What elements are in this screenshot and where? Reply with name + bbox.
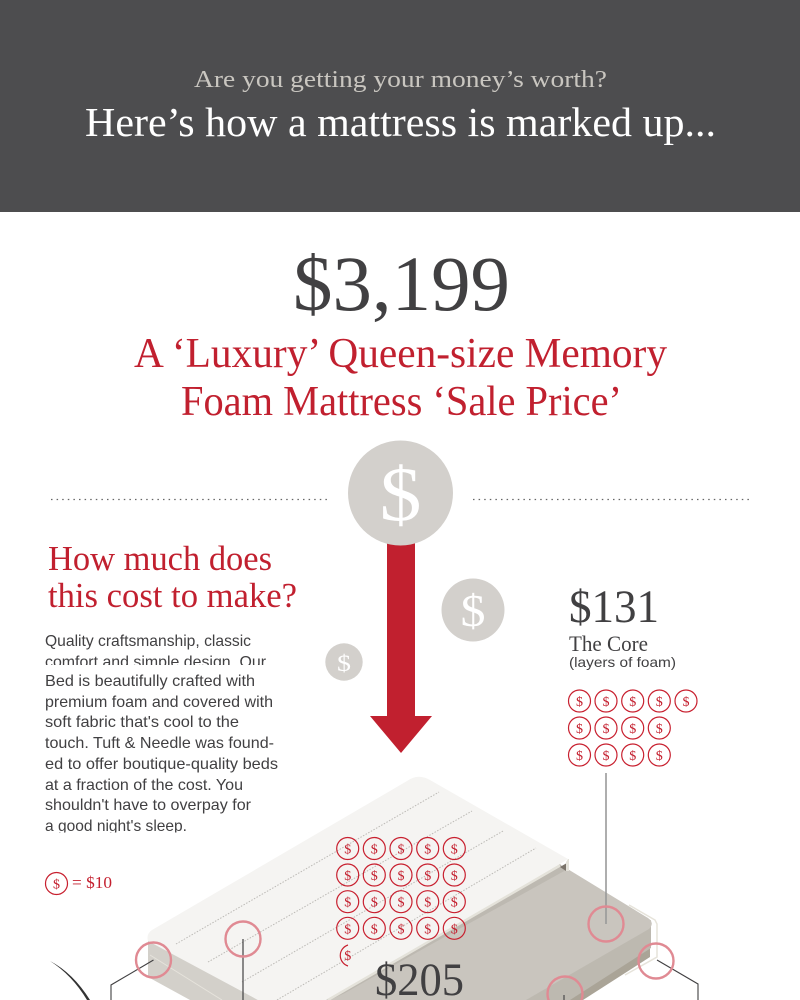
comfort layer coins: twenty and a half dollar coins: $ [424, 842, 431, 858]
body text block [45, 633, 278, 835]
legend: one coin equals ten dollars: $ [53, 878, 60, 892]
mattress illustration [148, 777, 657, 1000]
core price figure: $131 [569, 581, 659, 633]
core coins: thirteen dollar coins: $ [656, 695, 663, 710]
comfort layer coins: twenty and a half dollar coins: $ [371, 842, 378, 858]
mattress cover side [148, 937, 258, 1000]
comfort layer coins: twenty and a half dollar coins: $ [344, 842, 351, 858]
comfort layer coins: twenty and a half dollar coins: $ [344, 949, 351, 964]
mattress stitching [176, 792, 536, 1000]
icon: medium dollar coin [442, 578, 504, 642]
comfort layer coins: twenty and a half dollar coins: $ [371, 896, 378, 911]
core coins: thirteen dollar coins: $ [602, 722, 610, 737]
core coins: thirteen dollar coins: $ [602, 749, 610, 764]
body text block: Quality craftsmanship, classic [45, 633, 251, 650]
mattress core right side [555, 938, 650, 1000]
body text block: comfort and simple design. Our [45, 654, 267, 671]
heading: how much does this cost to make: How much does [48, 539, 272, 578]
body text block: shouldn't have to overpay for [45, 797, 252, 814]
icon: medium dollar coin: $ [460, 586, 486, 636]
header title: Here’s how a mattress is marked up... [85, 99, 716, 145]
arc: black curve lower left [50, 961, 90, 1000]
legend: one coin equals ten dollars [46, 872, 112, 894]
core coins: thirteen dollar coins: $ [602, 695, 610, 710]
core coins: thirteen dollar coins: $ [576, 695, 583, 710]
comfort layer coins: twenty and a half dollar coins: $ [451, 842, 458, 858]
core coins: thirteen dollar coins [568, 690, 697, 766]
core coins: thirteen dollar coins: $ [629, 695, 636, 710]
comfort layer coins: twenty and a half dollar coins: $ [398, 922, 404, 937]
mattress core outline [625, 905, 657, 975]
core coins: thirteen dollar coins: $ [576, 722, 583, 737]
sale price caption: Foam Mattress ‘Sale Price’ [181, 379, 622, 425]
sale price figure: $3,199 [293, 240, 510, 327]
body text block: at a fraction of the cost. You [45, 777, 243, 794]
icon: large dollar coin: $ [380, 452, 422, 538]
sale price caption [134, 331, 667, 425]
body text block: a good night's sleep. [45, 818, 187, 835]
header banner [0, 0, 800, 212]
body text block: premium foam and covered with [45, 694, 273, 711]
comfort layer coins: twenty and a half dollar coins: $ [344, 869, 351, 884]
core coins: thirteen dollar coins: $ [629, 749, 636, 764]
mattress cover top [148, 777, 568, 1000]
comfort layer coins: twenty and a half dollar coins: $ [451, 896, 458, 911]
icon: small dollar coin [325, 643, 363, 681]
icon: large dollar coin [348, 440, 453, 546]
heading: how much does this cost to make [48, 539, 297, 615]
body text block: soft fabric that's cool to the [45, 714, 239, 731]
arrow: red down arrow [370, 540, 432, 753]
sale price caption: A ‘Luxury’ Queen-size Memory [134, 331, 667, 377]
mattress cover shadow [330, 864, 566, 1000]
comfort layer coins: twenty and a half dollar coins: $ [398, 869, 404, 884]
core coins: thirteen dollar coins: $ [682, 695, 690, 710]
core coins: thirteen dollar coins: $ [629, 722, 636, 737]
comfort layer coins: twenty and a half dollar coins: $ [424, 922, 431, 937]
comfort layer coins: twenty and a half dollar coins: $ [371, 922, 378, 937]
mattress core top [320, 868, 652, 1000]
icon: small dollar coin: $ [337, 651, 351, 676]
comfort layer coins: twenty and a half dollar coins: $ [344, 922, 351, 937]
comfort layer coins: twenty and a half dollar coins [337, 838, 465, 966]
core sublabel: (layers of foam) [569, 654, 676, 670]
heading: how much does this cost to make: this cost to make? [48, 576, 297, 615]
comfort layer coins: twenty and a half dollar coins: $ [398, 842, 404, 858]
core coins: thirteen dollar coins: $ [656, 722, 663, 737]
comfort layer coins: twenty and a half dollar coins: $ [451, 922, 458, 937]
comfort layer coins: twenty and a half dollar coins: $ [451, 869, 458, 884]
core label: The Core [569, 631, 648, 656]
comfort layer coins: twenty and a half dollar coins: $ [344, 896, 351, 911]
comfort layer coins: twenty and a half dollar coins: $ [398, 896, 404, 911]
body text block: ed to offer boutique-quality beds [45, 756, 278, 773]
comfort layer coins: twenty and a half dollar coins: $ [371, 869, 378, 884]
comfort layer coins: twenty and a half dollar coins: $ [424, 896, 431, 911]
header subtitle: Are you getting your money’s worth? [194, 67, 607, 93]
body text block: Bed is beautifully crafted with [45, 673, 255, 690]
callout markers [136, 906, 674, 1000]
legend: one coin equals ten dollars: = $10 [72, 873, 112, 892]
comfort layer coins: twenty and a half dollar coins: $ [424, 869, 431, 884]
body text block: touch. Tuft & Needle was found- [45, 735, 274, 752]
callout leaders [111, 773, 698, 1000]
core coins: thirteen dollar coins: $ [656, 749, 663, 764]
core coins: thirteen dollar coins: $ [576, 749, 583, 764]
